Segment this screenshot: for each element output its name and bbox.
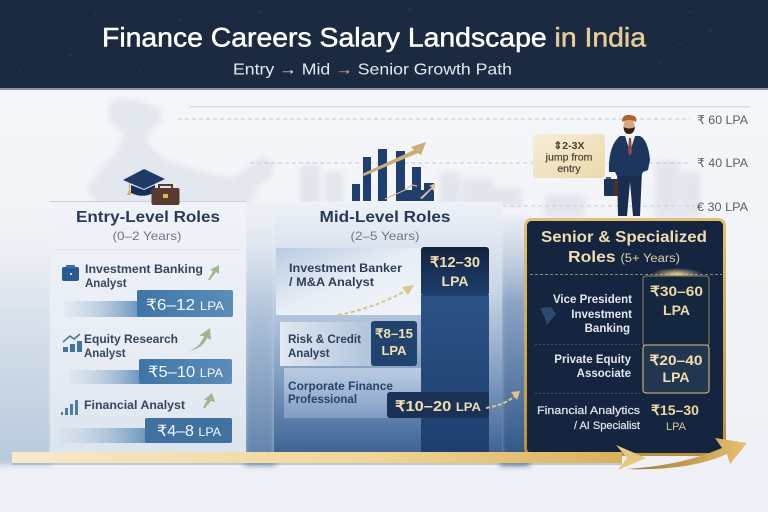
panel: entry-level roles: [50, 169, 246, 455]
salary axis labels: ₹ 60 LPA: [697, 113, 748, 127]
faint india map: [540, 307, 556, 325]
role name: Professional: [288, 394, 357, 406]
row: private equity associate: LPA: [663, 369, 689, 385]
growth arrow: [203, 393, 215, 408]
growth arrow: gold path: [12, 438, 747, 470]
role name: Investment: [571, 309, 632, 321]
row: financial analytics: LPA: [666, 421, 687, 433]
row: vice president: [540, 276, 709, 346]
role name: Analyst: [84, 348, 126, 360]
row: corporate finance professional: [284, 368, 520, 418]
row: investment banker: [276, 248, 422, 315]
heading: Mid-Level Roles: [320, 209, 451, 226]
salary value: ₹4–8 LPA: [157, 423, 221, 440]
panel: mid-level roles: [274, 202, 520, 454]
row: risk and credit analyst: ₹8–15: [375, 326, 413, 341]
row: risk and credit analyst: [280, 321, 417, 366]
header speckle: [19, 9, 743, 79]
role name: Associate: [577, 368, 631, 380]
salary box: 12-30: ₹12–30: [430, 255, 480, 271]
salary value: ₹6–12 LPA: [146, 297, 224, 314]
header band: [0, 0, 768, 90]
row: vice president: ₹30–60: [650, 283, 703, 299]
background: India map silhouette: [86, 98, 275, 204]
dashed growth arrow: [338, 291, 405, 315]
salary value: ₹15–30: [651, 402, 699, 418]
callout: 2-3X jump: ⇕2-3X: [554, 140, 584, 152]
heading line two: Roles (5+ Years): [568, 249, 680, 266]
role name: Analyst: [288, 348, 330, 360]
row: equity research analyst: [63, 328, 232, 384]
salary axis labels: € 30 LPA: [697, 200, 748, 214]
role name: Vice President: [553, 294, 632, 306]
callout: 2-3X jump: entry: [557, 163, 581, 175]
role name: Private Equity: [554, 354, 632, 366]
role name: Investment Banking: [85, 264, 203, 276]
growth arrow: [208, 265, 219, 280]
jacket: [609, 136, 650, 176]
heading: Entry-Level Roles: [76, 209, 220, 226]
icon: briefcase: [152, 185, 180, 205]
role name: Financial Analyst: [84, 400, 185, 412]
axis guide lines: [178, 119, 695, 206]
legs: [617, 170, 642, 216]
salary box: [387, 392, 489, 418]
subtitle: Entry → Mid → Senior Growth Path: [233, 62, 512, 78]
icon: businessman: [604, 115, 650, 216]
salary bar: [60, 428, 146, 443]
salary value: ₹5–10 LPA: [148, 364, 223, 381]
salary axis labels: ₹ 40 LPA: [697, 156, 748, 170]
role name: / M&A Analyst: [289, 277, 374, 289]
briefcase: [606, 177, 611, 179]
background: city skyline: [300, 160, 700, 218]
callout: 2-3X jump: [533, 134, 605, 178]
head: [624, 118, 634, 134]
divider glow: [530, 268, 722, 280]
title: Finance Careers Salary Landscape in India: [102, 22, 647, 52]
icon: bars: [61, 400, 78, 415]
role name: Analyst: [85, 278, 127, 290]
row: risk and credit analyst: LPA: [381, 343, 407, 358]
row: private equity associate: [554, 345, 709, 393]
row: investment banking analyst: [52, 249, 242, 317]
salary box: [643, 345, 709, 393]
icon: graduation cap: [123, 169, 165, 196]
years: (2–5 Years): [350, 229, 420, 243]
salary box: 12-30: [421, 247, 489, 296]
salary box: [371, 321, 417, 366]
callout: 2-3X jump: jump from: [545, 152, 593, 164]
icon: briefcase blue: [62, 265, 79, 281]
salary box: 12-30: LPA: [442, 273, 468, 289]
salary axis labels: [697, 113, 748, 214]
icon: mid-level rising bar chart: [352, 142, 436, 201]
role name: Investment Banker: [289, 263, 403, 275]
dashed arrow to senior: [486, 395, 516, 408]
role name: Risk & Credit: [288, 334, 361, 346]
salary box: [643, 276, 709, 346]
role name: Equity Research: [84, 334, 178, 346]
row: vice president: LPA: [663, 302, 690, 318]
row: financial analyst: [60, 393, 232, 443]
salary bar: [70, 370, 140, 384]
row: financial analytics: [537, 402, 699, 433]
role name: Banking: [585, 323, 630, 335]
background fog behind columns: [0, 190, 530, 465]
years: (0–2 Years): [112, 229, 182, 243]
role name: Financial Analytics: [537, 405, 641, 417]
icon: chart: [63, 334, 82, 352]
row: private equity associate: ₹20–40: [650, 352, 703, 368]
salary bar: [64, 301, 138, 317]
row: corporate finance professional: ₹10–20 LPA: [395, 399, 481, 415]
role name: Corporate Finance: [288, 381, 393, 393]
panel: senior and specialized roles: [526, 220, 724, 454]
heading: Senior & Specialized: [541, 229, 707, 246]
role name: / AI Specialist: [574, 420, 640, 432]
column: tall salary bar: [421, 295, 489, 454]
growth arrow: [189, 328, 211, 351]
